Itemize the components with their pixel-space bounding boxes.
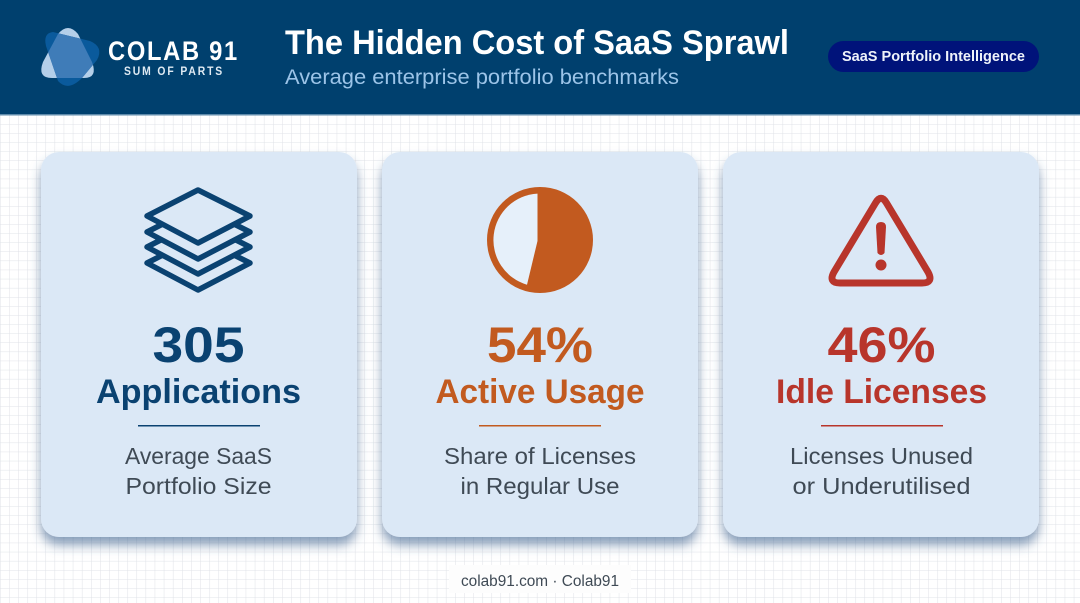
footer credit: colab91.com · Colab91 [461, 573, 619, 590]
stat: 305: 305 [152, 317, 244, 373]
panel: idle licenses [723, 152, 1039, 537]
footer credit [449, 565, 631, 593]
stat label: Applications [96, 373, 301, 411]
logo: Colab 91 [41, 28, 239, 86]
panel: active usage [382, 152, 698, 537]
header band [0, 0, 1080, 116]
icon: logo mark [41, 28, 99, 86]
panel: active usage: in Regular Use [460, 473, 620, 499]
icon: layers [147, 190, 250, 290]
description: Share of Licenses [444, 443, 636, 469]
icon: pie chart 54% [487, 187, 593, 293]
panel: applications [41, 152, 357, 537]
description: Licenses Unused [790, 443, 973, 469]
title: The Hidden Cost of SaaS Sprawl [285, 24, 789, 62]
badge: SaaS Portfolio Intelligence [828, 41, 1039, 72]
stat: 46%: 46% [828, 317, 936, 373]
description: Average SaaS [125, 443, 272, 469]
icon: warning triangle [832, 198, 930, 283]
stat: 54%: 54% [487, 317, 593, 373]
tagline: SUM OF PARTS [124, 66, 224, 78]
panel: applications: Portfolio Size [126, 473, 272, 499]
panel: idle licenses: or Underutilised [792, 473, 970, 499]
subtitle: Average enterprise portfolio benchmarks [285, 66, 679, 89]
stat label: Active Usage [436, 373, 644, 411]
stat label: Idle Licenses [776, 373, 987, 411]
wordmark: COLAB 91 [108, 37, 239, 66]
badge: SaaS Portfolio Intelligence: SaaS Portfolio Intelligence [842, 48, 1025, 65]
